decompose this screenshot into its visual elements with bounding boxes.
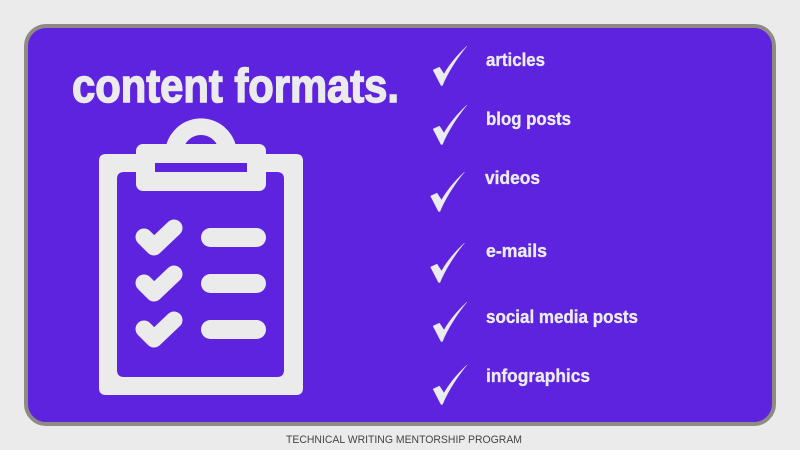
clipboard row 2 check (144, 274, 174, 293)
list item: articles (433, 46, 545, 86)
clipboard row 3 check (144, 320, 174, 339)
label: articles: articles (486, 50, 545, 70)
clipboard clip slot (155, 163, 247, 172)
icon: clipboard (99, 118, 303, 395)
title: content formats. (72, 59, 399, 112)
icon: tick (430, 243, 464, 282)
label: social media posts: social media posts (486, 307, 638, 327)
list item: blog posts (433, 105, 571, 144)
label: e-mails: e-mails (486, 241, 547, 261)
clipboard clip (136, 144, 266, 191)
list item: social media posts (433, 302, 638, 342)
footer text: TECHNICAL WRITING MENTORSHIP PROGRAM (286, 434, 522, 446)
label: infographics: infographics (486, 366, 590, 386)
label: videos: videos (485, 168, 540, 188)
list item: infographics (433, 365, 590, 404)
icon: tick (433, 105, 467, 144)
label: blog posts: blog posts (486, 109, 571, 129)
clipboard row 3 bar (201, 320, 266, 339)
icon: tick (433, 365, 467, 404)
clipboard ring (166, 118, 236, 146)
list item: videos (430, 168, 540, 212)
clipboard board (99, 154, 303, 395)
icon: tick (430, 172, 464, 212)
clipboard row 1 bar (201, 228, 266, 247)
list item: e-mails (430, 241, 547, 282)
clipboard row 1 check (144, 228, 174, 247)
icon: tick (433, 46, 467, 86)
icon: tick (433, 302, 467, 342)
clipboard row 2 bar (201, 274, 266, 293)
